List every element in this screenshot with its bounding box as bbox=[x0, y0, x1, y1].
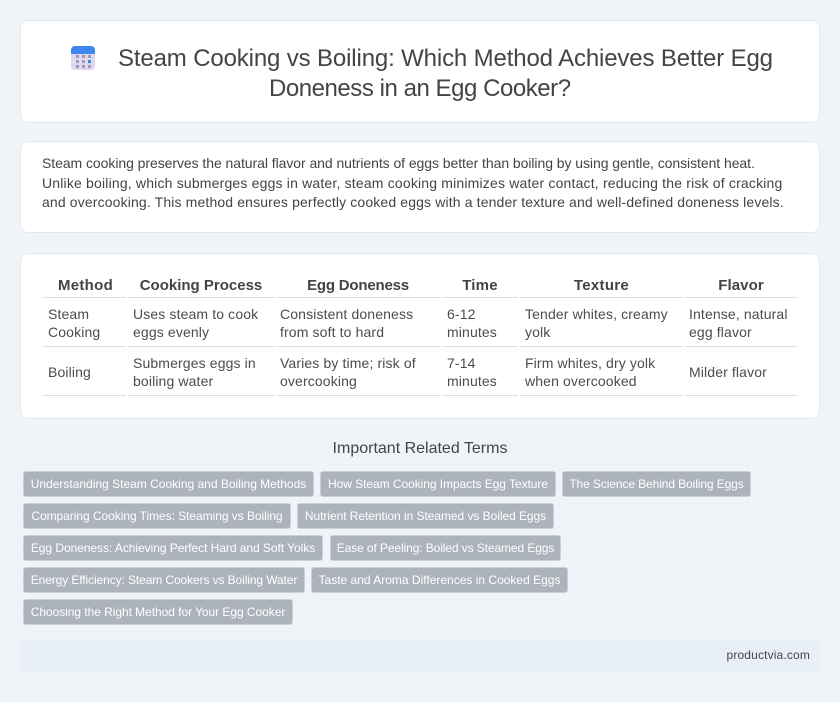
row: steam cooking: Cooking bbox=[48, 324, 100, 340]
heading bbox=[118, 45, 773, 102]
table header: Method bbox=[58, 277, 113, 294]
related term tags: Ease of Peeling: Boiled vs Steamed Eggs bbox=[337, 541, 554, 555]
table header: Egg Doneness bbox=[307, 277, 409, 294]
table header: Flavor bbox=[718, 277, 764, 294]
intro panel bbox=[20, 141, 820, 233]
intro text: Unlike boiling, which submerges eggs in water, steam cooking minimizes water contact, reducing the risk of cracking bbox=[42, 174, 782, 190]
related term tags: Comparing Cooking Times: Steaming vs Boiling bbox=[31, 509, 283, 523]
table header bbox=[58, 277, 764, 294]
row: boiling: overcooking bbox=[280, 373, 357, 389]
related term tags: Taste and Aroma Differences in Cooked Eggs bbox=[319, 573, 560, 587]
row: steam cooking: Tender whites, creamy bbox=[525, 306, 668, 322]
related term tags: Nutrient Retention in Steamed vs Boiled Eggs bbox=[305, 509, 546, 523]
related terms heading: Important Related Terms bbox=[333, 440, 507, 457]
text: The Science Behind Boiling Eggs bbox=[569, 477, 744, 491]
heading: Doneness in an Egg Cooker? bbox=[269, 75, 571, 102]
footer bar bbox=[20, 639, 820, 672]
comparison table panel bbox=[20, 253, 820, 419]
row: boiling: when overcooked bbox=[525, 373, 637, 389]
table header: Cooking Process bbox=[140, 277, 262, 294]
row: steam cooking bbox=[48, 306, 788, 340]
related term tags bbox=[23, 471, 751, 625]
row: steam cooking: Steam bbox=[48, 306, 89, 322]
intro text: Steam cooking preserves the natural flavor and nutrients of eggs better than boiling by using gentle, consistent heat. bbox=[42, 155, 755, 171]
title panel bbox=[20, 20, 820, 123]
row: steam cooking: Consistent doneness bbox=[280, 306, 413, 322]
row: boiling: 7-14 bbox=[447, 355, 476, 371]
row: boiling: minutes bbox=[447, 373, 497, 389]
row: boiling bbox=[48, 355, 767, 389]
row: boiling: Milder flavor bbox=[689, 364, 767, 380]
row: boiling: boiling water bbox=[133, 373, 213, 389]
row: boiling: Varies by time; risk of bbox=[280, 355, 416, 371]
related term tags: Egg Doneness: Achieving Perfect Hard and Soft Yolks bbox=[31, 541, 315, 555]
row: boiling: Firm whites, dry yolk bbox=[525, 355, 655, 371]
heading: Steam Cooking vs Boiling: Which Method Achieves Better Egg bbox=[118, 45, 773, 72]
row: steam cooking: Intense, natural bbox=[689, 306, 788, 322]
related term tags: How Steam Cooking Impacts Egg Texture bbox=[328, 477, 548, 491]
related term tags: Choosing the Right Method for Your Egg Cooker bbox=[31, 605, 285, 619]
row: steam cooking: egg flavor bbox=[689, 324, 752, 340]
row: steam cooking: from soft to hard bbox=[280, 324, 384, 340]
table header: Time bbox=[462, 277, 498, 294]
row: boiling: Submerges eggs in bbox=[133, 355, 256, 371]
footer source: productvia.com bbox=[727, 648, 810, 662]
related term tags: Understanding Steam Cooking and Boiling Methods bbox=[31, 477, 306, 491]
related term tags: Energy Efficiency: Steam Cookers vs Boiling Water bbox=[31, 573, 297, 587]
row: steam cooking: eggs evenly bbox=[133, 324, 209, 340]
row: boiling: Boiling bbox=[48, 364, 91, 380]
row: steam cooking: yolk bbox=[525, 324, 550, 340]
row: steam cooking: 6-12 bbox=[447, 306, 476, 322]
intro text bbox=[42, 155, 784, 210]
row: steam cooking: Uses steam to cook bbox=[133, 306, 258, 322]
table header: Texture bbox=[574, 277, 629, 294]
row: steam cooking: minutes bbox=[447, 324, 497, 340]
icon: calendar bbox=[71, 46, 95, 70]
intro text: and overcooking. This method ensures perfectly cooked eggs with a tender texture and well-defined doneness levels. bbox=[42, 194, 784, 210]
